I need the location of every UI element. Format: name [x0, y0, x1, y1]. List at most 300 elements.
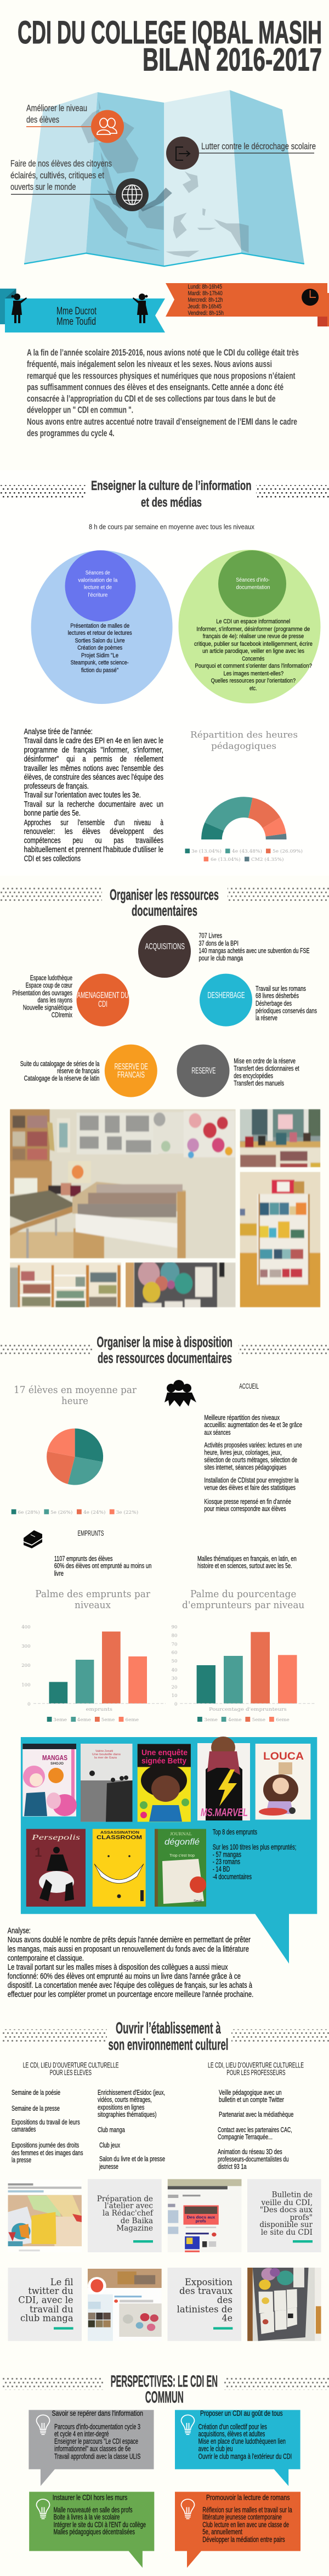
chart: palme du pourcentage d'emprunteurs: 70 — [172, 1642, 177, 1647]
chart: palme des emprunts par niveaux: 3eme — [53, 1717, 67, 1723]
chart: palme des emprunts par niveaux: niveaux — [75, 1599, 111, 1611]
book cover: une bouteille dans la mer de gaza: la mer de Gaza — [94, 1756, 117, 1760]
photo: shelves — [10, 1262, 121, 1307]
text block: analyse de l'annee: Approches sur l'ensemble d'un niveau à — [24, 819, 164, 827]
book cover: une enquete signee betty: signée Betty — [141, 1756, 187, 1766]
book cover: journal d'un degonfle: Trop c'est trop — [169, 1854, 195, 1858]
panel: info-documentation ellipses: Concernés — [242, 656, 265, 662]
circle: desherbage: la réserve — [256, 1014, 277, 1022]
text block: analyse des emprunts: effectuer pour les compléter promet un pourcentage encore meilleure l'année prochaine. — [8, 1990, 253, 1999]
chart: palme des emprunts par niveaux: Palme des emprunts par — [35, 1588, 150, 1600]
text block: emprunts: 1107 emprunts des élèves — [54, 1554, 113, 1563]
ribbon: opening hours: Jeudi: 8h-16h45 — [188, 303, 222, 310]
text block: top 8 des emprunts — [213, 1828, 296, 1881]
circle: amenagement du cdi: Nouvelle signalétique — [23, 1004, 72, 1012]
heading: organiser la mise a disposition: Organiser la mise à disposition — [97, 1334, 232, 1350]
circle: acquisitions: 707 Livres — [198, 932, 222, 940]
callout: proposer un cdi: avec le club jeu — [198, 2444, 232, 2453]
chart: palme du pourcentage d'emprunteurs: 80 — [172, 1633, 177, 1638]
panel: info-documentation ellipses: Quelles ressources pour l'orientation? — [211, 678, 296, 684]
column: pour les professeurs: Compagnie Terraquée... — [218, 2133, 273, 2141]
book cover: une enquete signee betty — [138, 1744, 191, 1822]
panel: lecture ellipses: Séances de — [86, 570, 110, 576]
tile: le fil twitter — [8, 2268, 82, 2341]
panel: info-documentation ellipses: critique, publier sur facebook intelligemment, écrire — [194, 641, 313, 647]
ribbon: opening hours: Lundi: 8h-16h45 — [188, 284, 222, 290]
tile: site screenshot des docs aux profs: profs — [196, 2219, 206, 2224]
circle: desherbage — [200, 974, 317, 1027]
heading: organiser les ressources: documentaires — [132, 902, 197, 919]
column: pour les eleves: sitographies thématiques) — [98, 2110, 157, 2118]
map label: citoyens: Faire de nos élèves des citoyens — [10, 159, 112, 169]
icon: girl silhouette left — [11, 294, 27, 323]
chart: palme du pourcentage d'emprunteurs: 60 — [172, 1650, 177, 1656]
chart: palme des emprunts par niveaux: 200 — [21, 1663, 31, 1669]
circle: desherbage: 68 livres désherbés — [256, 991, 299, 1000]
text block: top 8 des emprunts: Top 8 des emprunts — [213, 1828, 257, 1836]
panel: top emprunts speech bubble — [21, 1737, 317, 1964]
panel: lecture ellipses: lectures et retour de lectures — [68, 630, 132, 636]
text block: accueil: aux séances — [204, 1428, 231, 1436]
callout: savoir se reperer: Savoir se repérer dans l'information — [52, 2409, 143, 2417]
circle: desherbage: DESHERBAGE — [207, 991, 245, 1000]
column: pour les eleves: Expositions journée des droits — [12, 2141, 80, 2149]
tile: bulletin de veille: disponible sur — [259, 2220, 313, 2229]
panel: info-documentation ellipses: français de 4e): réaliser une revue de presse — [203, 633, 304, 640]
text block: accueil: pour mieux correspondre aux élèves — [204, 1504, 286, 1513]
book cover: louca: LOUCA — [263, 1751, 304, 1762]
heading: ouvrir l'etablissement — [109, 2020, 228, 2054]
callout: instaurer le cdi hors les murs: Malles pédagogiques décentralisées — [54, 2527, 135, 2536]
book cover: persepolis: 1 — [35, 1845, 42, 1860]
panel: info-documentation ellipses: etc. — [249, 685, 257, 692]
chart: repartition des heures (half donut): 4e (43.48%) — [232, 848, 262, 854]
text block: analyse des emprunts: Le travail portant sur les malles mises à disposition des collègues a aussi mieux — [8, 1963, 228, 1972]
photo: window display — [240, 1109, 320, 1168]
tile: le fil twitter: twitter du — [28, 2286, 73, 2297]
chart: repartition des heures (half donut): 6e (13.04%) — [211, 856, 241, 863]
panel: info-documentation ellipses: Pourquoi et comment s'orienter dans l'information? — [195, 663, 312, 669]
heading: ouvrir l'etablissement: Ouvrir l’établissement à — [116, 2020, 221, 2037]
tile: preparation de l'atelier: Préparation de — [97, 2195, 153, 2203]
column: pour les professeurs: Contact avec les partenaires CAC, — [218, 2126, 292, 2134]
ribbon: staff names — [0, 289, 165, 332]
callout: savoir se reperer: Enseigner le parcours "Le CDI espace — [54, 2437, 138, 2445]
photo: manga corner with drawings — [10, 1109, 236, 1259]
callout: instaurer le cdi hors les murs: Instaurer le CDI hors les murs — [53, 2493, 127, 2502]
chart: eleves par heure (pie): 17 élèves en moyenne par — [14, 1384, 137, 1396]
column: pour les eleves: camarades — [12, 2125, 36, 2133]
text block: analyse de l'annee — [24, 728, 164, 864]
text block: analyse de l'annee: désinformer" qui a permis de réellement — [24, 755, 163, 764]
tile: le fil twitter: travail du — [30, 2304, 73, 2315]
callout: instaurer le cdi hors les murs: Boite à livres à la vie scolaire — [54, 2512, 120, 2521]
heading: perspectives: COMMUN — [145, 2388, 184, 2406]
icon: globe in dark circle — [116, 178, 149, 211]
callout: proposer un cdi: Mise en place d'une ludothèqueen lien — [198, 2437, 286, 2445]
intro paragraph — [27, 348, 299, 438]
tile: preparation de l'atelier — [88, 2179, 162, 2252]
text block: analyse de l'annee: bonne partie des 5e. — [24, 809, 81, 818]
ribbon: staff names: Mme Ducrot — [56, 306, 97, 317]
chart: palme du pourcentage d'emprunteurs: 5eme — [252, 1717, 265, 1723]
text block: analyse des emprunts: Nous avons doublé le nombre de prêts depuis l'année dernière en permettant de prêter — [8, 1935, 251, 1944]
chart: eleves par heure (pie): 6e (28%) — [18, 1509, 40, 1515]
text block: analyse des emprunts: les mangas, mais aussi en proposant un renouvellement du fonds avec de la littérature — [8, 1944, 249, 1954]
icon: clock — [302, 289, 319, 306]
folded map illustration — [24, 90, 304, 266]
panel: lecture ellipses: Steampunk, cette science- — [71, 659, 129, 666]
text block: top 8 des emprunts: - 23 romans — [213, 1857, 240, 1866]
icon: light bulb — [36, 2499, 49, 2518]
tile: preparation de l'atelier: de Baika — [121, 2217, 153, 2225]
column: pour les eleves: LE CDI, LIEU D’OUVERTURE CULTURELLE — [23, 2061, 119, 2070]
text block: analyse de l'annee: compétences peu ou pas travaillées — [24, 837, 163, 845]
callout: promouvoir la lecture: littérature jeunesse contemporaine — [202, 2512, 282, 2521]
chart: palme du pourcentage d'emprunteurs: 3eme — [204, 1717, 218, 1723]
book cover: ms marvel — [197, 1737, 250, 1820]
tile: exposition des latinistes — [168, 2268, 241, 2341]
tile: exposition des latinistes: latinistes de — [177, 2304, 232, 2315]
intro paragraph: des programmes du cycle 4. — [27, 429, 115, 438]
ribbon: opening hours: Mercredi: 8h-12h — [188, 297, 223, 303]
callout: instaurer le cdi hors les murs — [29, 2492, 154, 2568]
icon: girl silhouette right — [133, 294, 148, 323]
tile: preparation de l'atelier: Magazine — [116, 2224, 153, 2233]
circle: reserve de francais: RESERVE DE — [115, 1062, 148, 1072]
icon: light bulb — [181, 2499, 194, 2518]
book cover: journal d'un degonfle: JOURNAL — [170, 1831, 192, 1836]
chart: repartition des heures (half donut) — [185, 730, 303, 863]
chart: palme des emprunts par niveaux: 0 — [27, 1701, 31, 1707]
text block: analyse de l'annee: Travail sur la recherche documentaire avec un — [24, 800, 163, 809]
callout: savoir se reperer: Parcours d'info-documentation cycle 3 — [54, 2422, 140, 2431]
text block: accueil: sites internet, séances pédagogiques — [204, 1463, 287, 1472]
column: pour les professeurs: professeurs-documentalistes du — [218, 2155, 289, 2163]
photo: front-facing book rack — [240, 1172, 320, 1307]
column: pour les professeurs — [208, 2061, 304, 2171]
callout: promouvoir la lecture — [175, 2492, 300, 2568]
tile: exposition des latinistes: 4e — [222, 2313, 232, 2324]
tile: site screenshot des docs aux profs: Des docs aux — [187, 2215, 215, 2219]
column: pour les professeurs: Animation du réseau 3D des — [218, 2147, 282, 2156]
text block: top 8 des emprunts: -4 documentaires — [213, 1872, 252, 1881]
chart: repartition des heures (half donut): 5e (26.09%) — [273, 848, 303, 854]
tile: bulletin de veille: le site du CDI — [261, 2228, 313, 2237]
text block: accueil: heure, livres jeux, coloriages, jeux, — [204, 1448, 282, 1457]
chart: palme des emprunts par niveaux: 300 — [21, 1644, 31, 1649]
chart: eleves par heure (pie): 4e (24%) — [83, 1509, 105, 1515]
chart: palme du pourcentage d'emprunteurs: 30 — [172, 1676, 177, 1681]
tile: notice board photo — [247, 2268, 321, 2341]
chart: palme du pourcentage d'emprunteurs: 40 — [172, 1667, 177, 1673]
column: pour les eleves: Enrichissement d'Esidoc (jeux, — [98, 2088, 165, 2096]
book cover: louca — [256, 1744, 310, 1819]
text block: analyse de l'annee: CDI et ses collections — [24, 855, 81, 864]
chart: palme du pourcentage d'emprunteurs: 6eme — [276, 1717, 290, 1723]
panel: lecture ellipses: Présentation de malles de — [70, 623, 129, 629]
chart: eleves par heure (pie) — [12, 1384, 138, 1515]
circle: acquisitions — [138, 925, 310, 978]
panel: lecture ellipses: valorisation de la — [78, 577, 118, 583]
book cover: journal d'un degonfle — [155, 1829, 206, 1907]
panel: info-documentation ellipses — [179, 550, 320, 703]
chart: palme du pourcentage d'emprunteurs: 0 — [174, 1701, 177, 1707]
tile: exposition des latinistes: des travaux — [179, 2286, 232, 2297]
map label: citoyens — [10, 159, 149, 211]
heading: ouvrir l'etablissement: son environnement culturel — [109, 2036, 228, 2054]
callout: promouvoir la lecture: 5e, annuellement — [202, 2527, 242, 2536]
circle: acquisitions: 37 dons de la BPI — [198, 939, 239, 947]
chart: palme du pourcentage d'emprunteurs: 90 — [172, 1625, 177, 1630]
chart: eleves par heure (pie): 3e (22%) — [116, 1509, 138, 1515]
text block: analyse des emprunts: fonctionné: 60% des élèves ont emprunté au moins un livre dans l'année grâce à ce — [8, 1972, 241, 1981]
tile: bulletin de veille: "Des docs aux — [260, 2206, 313, 2214]
callout: proposer un cdi: acquisitions, élèves et adultes — [198, 2430, 265, 2438]
text block: analyse des emprunts: dispositif. La concertation menée avec l'équipe des collègues de français, sur les achats à — [8, 1981, 252, 1990]
circle: amenagement du cdi: Espace ludothèque — [30, 974, 72, 982]
callout: proposer un cdi — [175, 2409, 300, 2486]
column: pour les professeurs: Veille pédagogique avec un — [219, 2088, 282, 2096]
tile: bulletin de veille: profs" — [290, 2213, 313, 2222]
column: pour les eleves: Semaine de la poésie — [12, 2088, 60, 2096]
photo: mandala board — [126, 1261, 236, 1307]
column: pour les eleves — [12, 2061, 165, 2171]
circle: reserve: des encyclopédies — [234, 1072, 273, 1080]
chart: palme du pourcentage d'emprunteurs: 10 — [172, 1693, 177, 1699]
column: pour les eleves: vidéos, courts métrages, — [98, 2095, 152, 2104]
book cover: mangas shojo: SHOJO — [50, 1762, 64, 1766]
panel: info-documentation ellipses: Informer, s'informer, désinformer (programme de — [196, 626, 310, 633]
circle: amenagement du cdi: Présentation des ouvrages — [13, 989, 72, 997]
map label: citoyens: éclairés, cultivés, critiques et — [10, 170, 104, 181]
circle: acquisitions: pour le club manga — [198, 954, 243, 962]
tile: exposition des latinistes: Exposition — [185, 2277, 232, 2288]
circle: reserve de francais: réserve de français — [57, 1067, 100, 1075]
panel: lecture ellipses: lecture et de — [84, 584, 112, 591]
map label: citoyens: ouverts sur le monde — [10, 182, 76, 192]
heading: organiser les ressources — [110, 886, 219, 919]
column: pour les eleves: Club manga — [98, 2126, 125, 2134]
chart: palme du pourcentage d'emprunteurs: 20 — [172, 1685, 177, 1690]
column: pour les eleves: Club jeux — [99, 2141, 120, 2149]
book cover: persepolis — [26, 1829, 86, 1907]
caption: 8 h de cours: 8 h de cours par semaine en moyenne avec tous les niveaux — [89, 523, 255, 531]
text block: analyse de l'annee: professeurs de français. — [24, 782, 89, 791]
tile: bulletin de veille: Bulletin de — [272, 2191, 313, 2200]
chart: repartition des heures (half donut): CM2 (4.35%) — [251, 856, 283, 863]
icon: light bulb — [181, 2415, 194, 2434]
tile: preparation de l'atelier: l'atelier avec — [105, 2201, 153, 2210]
text block: accueil — [204, 1382, 302, 1513]
chart: palme des emprunts par niveaux: emprunts — [86, 1707, 112, 1712]
book cover: ms marvel: MS.MARVEL — [201, 1807, 248, 1819]
chart: eleves par heure (pie): 5e (26%) — [50, 1509, 72, 1515]
chart: palme du pourcentage d'emprunteurs — [172, 1588, 316, 1723]
heading: enseigner la culture: et des médias — [141, 495, 202, 510]
map label: ameliorer le niveau: des élèves — [26, 114, 59, 125]
column: pour les eleves: Semaine de la presse — [12, 2104, 60, 2112]
heading: organiser la mise a disposition: des ressources documentaires — [98, 1350, 232, 1366]
text block: analyse de l'annee: habituellement et prennent l'habitude d'utiliser le — [24, 845, 163, 854]
callout: instaurer le cdi hors les murs: Intégrer le site du CDI à l'ENT du collège — [54, 2520, 146, 2529]
circle: reserve: Transfert des dictionnaires et — [234, 1064, 299, 1073]
heading: enseigner la culture: Enseigner la culture de l’information — [91, 478, 251, 493]
icon: light bulb — [36, 2415, 49, 2434]
icon: three children — [164, 1380, 196, 1407]
circle: acquisitions: ACQUISITIONS — [145, 942, 185, 951]
text block: analyse des emprunts: Analyse: — [8, 1926, 31, 1936]
column: pour les professeurs: district 93 1a — [218, 2162, 247, 2171]
column: pour les eleves: POUR LES ELEVES — [50, 2068, 92, 2077]
title — [18, 15, 322, 78]
chart: palme des emprunts par niveaux: 4eme — [77, 1717, 91, 1723]
panel: lecture ellipses — [31, 550, 173, 704]
text: PERSPECTIVES: LE CDI EN — [111, 2372, 218, 2391]
book cover: mangas shojo: MANGAS — [42, 1754, 67, 1762]
text block: analyse de l'annee: travailler les mêmes notions avec l'ensemble des — [24, 764, 163, 773]
heading: enseigner la culture — [91, 478, 251, 510]
text block: top 8 des emprunts: - 57 mangas — [213, 1850, 241, 1859]
chart: palme du pourcentage d'emprunteurs: d'emprunteurs par niveau — [182, 1599, 304, 1611]
ribbon: staff names: Mme Toufid — [56, 316, 96, 328]
panel: info-documentation ellipses: documentation — [236, 584, 270, 591]
chart: repartition des heures (half donut): Répartition des heures — [190, 730, 298, 740]
heading: organiser la mise a disposition — [97, 1334, 232, 1366]
circle: reserve: Mise en ordre de la réserve — [234, 1057, 296, 1065]
column: pour les professeurs: bulletin et un compte Twitter — [219, 2095, 284, 2104]
panel: lecture ellipses: fiction du passé" — [81, 667, 118, 674]
column: pour les eleves: la presse — [12, 2156, 31, 2164]
circle: amenagement du cdi: CDI — [98, 1000, 107, 1009]
panel: lecture ellipses: Sorties Salon du Livre — [75, 638, 125, 644]
intro paragraph: développer un " CDI en commun ". — [27, 405, 133, 415]
tile: le fil twitter: CDI, avec le — [18, 2295, 73, 2306]
panel: info-documentation ellipses: un article parodique, veiller en ligne avec les — [202, 648, 304, 655]
column: pour les eleves: jeunesse — [99, 2162, 118, 2171]
callout: savoir se reperer: Travail approfondi avec la classe ULIS — [54, 2451, 140, 2460]
text block: emprunts: 60% des élèves ont emprunté au moins un — [54, 1562, 151, 1570]
circle: reserve de francais: Catalogage de la réserve de latin — [24, 1074, 99, 1083]
book cover: une bouteille dans la mer de gaza — [81, 1744, 133, 1822]
heading: organiser les ressources: Organiser les ressources — [110, 886, 219, 903]
chart: eleves par heure (pie): heure — [61, 1395, 88, 1407]
chart: repartition des heures (half donut): pédagogiques — [211, 741, 276, 751]
tile: preparation de l'atelier: la Rédac'chef — [103, 2209, 154, 2218]
map label: ameliorer le niveau — [26, 103, 124, 143]
book cover: mangas shojo — [22, 1744, 77, 1817]
callout: savoir se reperer — [29, 2409, 154, 2486]
circle: desherbage: Désherbage des — [256, 999, 292, 1007]
panel: lecture ellipses: l'écriture — [88, 591, 108, 598]
callout: promouvoir la lecture: Développer la médiation entre pairs — [202, 2535, 285, 2544]
photos: CDI library collage — [10, 1109, 320, 1307]
panel: lecture ellipses: Création de poèmes — [77, 645, 123, 651]
book cover: journal d'un degonfle: dégonflé — [164, 1837, 200, 1847]
circle: reserve de francais — [20, 1045, 157, 1097]
circle: amenagement du cdi: dans les rayons — [37, 996, 72, 1004]
panel: info-documentation ellipses: Les images mentent-elles? — [224, 670, 283, 677]
callout: promouvoir la lecture: Promouvoir la lecture de romans — [206, 2493, 290, 2502]
heading: perspectives — [111, 2372, 218, 2406]
text block: emprunts — [54, 1529, 151, 1577]
circle: amenagement du cdi: CDIremix — [52, 1011, 72, 1019]
tile: site screenshot des docs aux profs — [168, 2179, 241, 2252]
book cover: persepolis: Persepolis — [31, 1834, 81, 1842]
callout: proposer un cdi: Création d'un collectif pour les — [198, 2422, 267, 2431]
text block: analyse des emprunts — [8, 1926, 253, 1999]
ribbon: opening hours: Vendredi: 8h-15h — [188, 310, 224, 317]
circle: amenagement du cdi: AMENAGEMENT DU — [77, 991, 128, 1000]
book cover: assassination classroom — [93, 1829, 146, 1907]
icon: stack of books — [24, 1530, 42, 1548]
circle: amenagement du cdi — [13, 974, 129, 1027]
circle: reserve: Transfert des manuels — [234, 1079, 284, 1087]
text block: analyse de l'annee: élèves, de construire des séances avec l'équipe des — [24, 773, 163, 782]
chart: palme des emprunts par niveaux: 100 — [21, 1683, 31, 1688]
text block: top 8 des emprunts: - 14 BD — [213, 1864, 230, 1873]
chart: palme du pourcentage d'emprunteurs: 50 — [172, 1659, 177, 1664]
tile: bulletin de veille: veille du CDI, — [261, 2199, 313, 2207]
circle: reserve de francais: Suite du catalogage de séries de la — [20, 1059, 100, 1068]
tile: le fil twitter: Le fil — [50, 2277, 73, 2288]
text block: analyse de l'annee: Travail sur l'orientation avec toutes les 3e. — [24, 791, 141, 800]
book cover: assassination classroom: ASSASSINATION — [100, 1831, 139, 1835]
circle: amenagement du cdi: Espace coup de cœur — [26, 981, 72, 989]
text block: accueil: ACCUEIL — [239, 1382, 259, 1390]
panel: info-documentation ellipses: Séances d'info- — [236, 577, 270, 583]
chart: palme des emprunts par niveaux: 5eme — [101, 1717, 115, 1723]
circle: reserve de francais: FRANCAIS — [117, 1070, 145, 1080]
column: pour les eleves: Salon du livre et de la presse — [99, 2155, 165, 2163]
circle: desherbage: Travail sur les romans — [256, 984, 306, 993]
panel: info-documentation ellipses: Le CDI un espace informationnel — [216, 618, 290, 625]
tile: le fil twitter: club manga — [20, 2313, 73, 2324]
text block: analyse de l'annee: Analyse tirée de l'année: — [24, 728, 93, 736]
text block: analyse de l'annee: programme de français "Informer, s'informer, — [24, 746, 163, 755]
text block: analyse de l'annee: renouveler: les élèves développent des — [24, 827, 163, 836]
circle: reserve: RESERVE — [191, 1067, 215, 1075]
icon: orange circle with people — [91, 110, 124, 143]
callout: savoir se reperer: et cycle 4 en inter-degré — [54, 2430, 109, 2438]
chart: palme du pourcentage d'emprunteurs: Pourcentage d'emprunteurs — [209, 1707, 287, 1712]
tile: exposition des latinistes: des — [217, 2295, 232, 2306]
chart: palme du pourcentage d'emprunteurs: 4eme — [228, 1717, 241, 1723]
chart: palme des emprunts par niveaux — [21, 1588, 166, 1723]
text block: accueil: Meilleure répartition des niveaux — [204, 1413, 280, 1422]
text block: analyse des emprunts: contemporaine et classique. — [8, 1953, 84, 1963]
book cover: assassination classroom: CLASSROOM — [97, 1835, 142, 1841]
book cover: une bouteille dans la mer de gaza: Une bouteille dans — [92, 1753, 121, 1756]
callout: savoir se reperer: informationnel" aux classes de 6e — [54, 2444, 131, 2453]
map label: lutter contre le decrochage — [166, 137, 316, 170]
column: pour les eleves: expositions en lignes — [98, 2103, 145, 2111]
circle: reserve — [177, 1045, 299, 1097]
panel: lecture ellipses: Projet Sidim "Le — [81, 652, 118, 659]
text block: emprunts: livre — [54, 1569, 64, 1577]
chart: palme du pourcentage d'emprunteurs: Palme du pourcentage — [190, 1588, 296, 1600]
book cover: une enquete signee betty: Une enquête — [141, 1748, 188, 1757]
ribbon: opening hours: Mardi: 8h-17h40 — [188, 290, 223, 297]
column: pour les professeurs: POUR LES PROFESSEURS — [226, 2068, 285, 2077]
column: pour les eleves: des femmes et des images dans — [12, 2149, 83, 2157]
text block: emprunts: EMPRUNTS — [78, 1529, 104, 1537]
text block: malles thematiques — [197, 1554, 297, 1570]
chart: palme des emprunts par niveaux: 6eme — [125, 1717, 139, 1723]
tile: tweet baika — [8, 2179, 82, 2252]
text block: analyse de l'annee: Travail dans le cadre des EPI en 4e en lien avec le — [24, 737, 163, 746]
column: pour les professeurs: Partenariat avec la médiathèque — [219, 2110, 293, 2118]
